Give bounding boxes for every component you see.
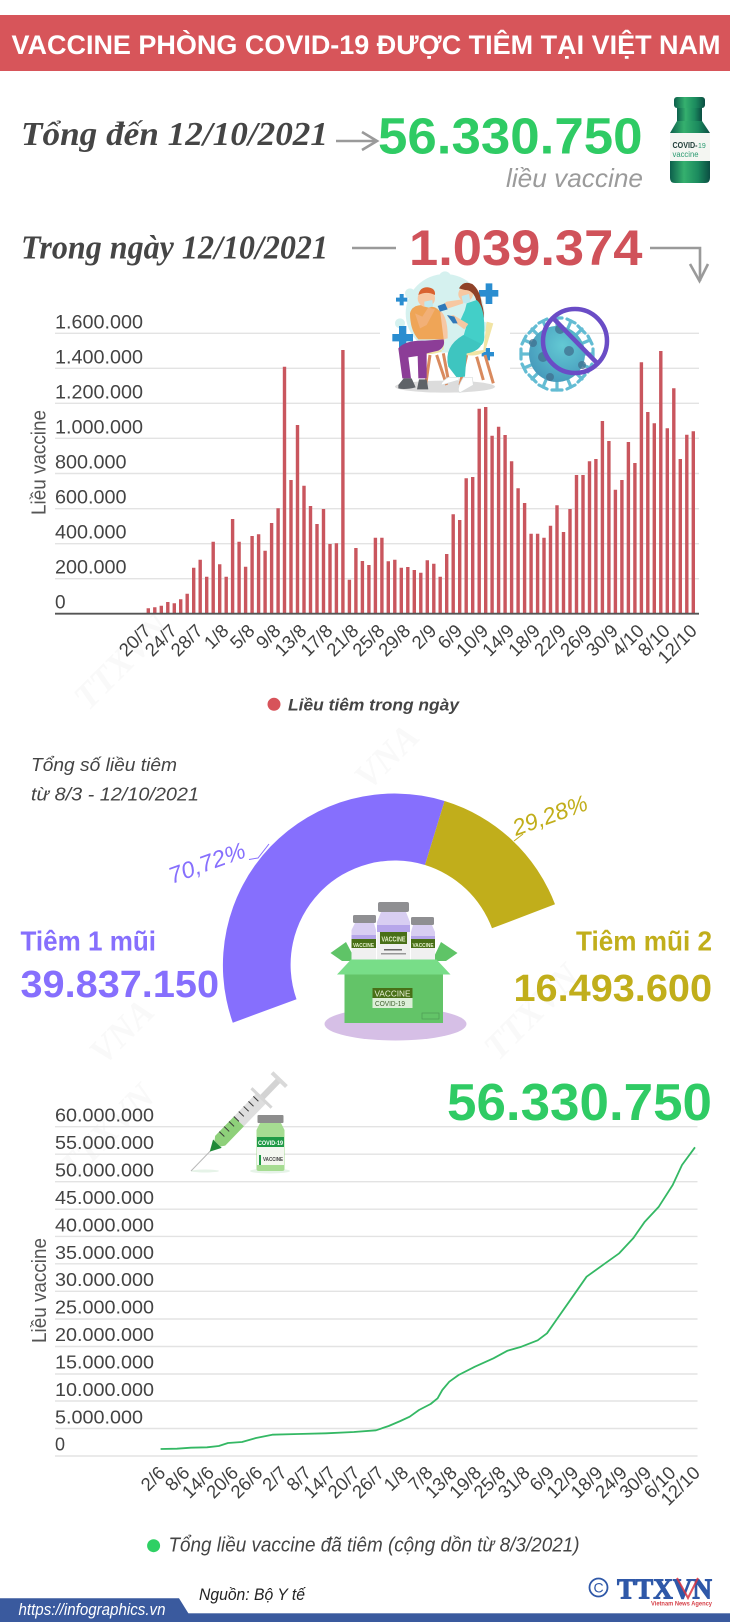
second dose number: 16.493.600	[514, 968, 712, 1010]
y axis title: Liều vaccine	[29, 1238, 51, 1343]
nurse	[458, 287, 473, 301]
x axis labels: 24/7	[141, 620, 181, 660]
x axis labels: 6/9	[525, 1462, 558, 1495]
icon: vaccine vial: COVID-	[672, 141, 698, 150]
x axis labels: 25/8	[469, 1462, 510, 1502]
percent: first dose: 70,72%	[165, 837, 249, 889]
footer band	[0, 1598, 730, 1622]
small vial right	[411, 917, 435, 961]
y axis labels: 1.200.000	[55, 382, 143, 403]
x axis labels: 1/8	[200, 620, 233, 653]
x axis labels: 1/8	[379, 1462, 412, 1495]
x axis labels: 26/9	[556, 620, 596, 660]
icon: vaccine vial: 19	[698, 143, 706, 150]
y axis labels: 45.000.000	[55, 1188, 154, 1208]
y axis labels: 800.000	[55, 452, 126, 473]
small vial	[256, 1115, 284, 1171]
x axis labels: 19/8	[445, 1462, 485, 1502]
line	[161, 1147, 695, 1449]
x axis labels: 2/9	[407, 620, 440, 653]
x axis labels: 7/8	[404, 1462, 437, 1495]
bar chart: daily doses	[28, 312, 701, 668]
x axis labels: 14/7	[299, 1462, 339, 1502]
line chart: cumulative doses	[29, 1106, 704, 1510]
watermark: TTXVN	[476, 954, 589, 1067]
watermark: TTXVN	[66, 604, 179, 717]
y axis labels: 40.000.000	[55, 1215, 154, 1235]
y axis labels: 1.000.000	[55, 417, 143, 438]
watermark: VNA	[81, 991, 162, 1072]
y axis labels: 30.000.000	[55, 1270, 154, 1290]
y axis labels: 200.000	[55, 557, 126, 578]
logo: TTXVN: Vietnam News Agency	[651, 1602, 713, 1608]
title: VACCINE PHÒNG COVID-19 ĐƯỢC TIÊM TẠI VIỆT NAM	[12, 29, 720, 60]
small vial left: VACCINE	[353, 943, 374, 949]
x axis labels: 10/9	[452, 620, 492, 660]
x axis labels: 20/7	[323, 1462, 364, 1502]
y axis labels: 20.000.000	[55, 1325, 154, 1345]
icon: vaccine vial	[670, 97, 710, 183]
patient	[410, 305, 447, 339]
x axis labels: 21/8	[322, 620, 362, 660]
x axis labels: 18/9	[566, 1462, 607, 1502]
x axis labels: 8/7	[282, 1462, 315, 1495]
y axis title: Liều vaccine	[28, 410, 50, 515]
y axis labels: 400.000	[55, 522, 126, 543]
x axis labels: 12/10	[653, 620, 701, 668]
icon: vaccination scene	[392, 271, 498, 393]
x axis labels: 29/8	[374, 620, 414, 660]
ban sign	[543, 309, 607, 373]
bars	[148, 350, 693, 614]
watermark	[51, 604, 589, 1187]
x axis labels	[136, 1462, 704, 1510]
connector lines	[249, 844, 269, 860]
box body	[344, 974, 443, 1023]
flaps	[330, 942, 356, 961]
arrow: daily down	[650, 248, 708, 281]
x axis labels: 9/8	[252, 620, 285, 653]
gauge caption: từ 8/3 - 12/10/2021	[31, 785, 199, 805]
y axis labels: 15.000.000	[55, 1352, 154, 1372]
gauge caption	[31, 755, 199, 805]
y axis labels: 50.000.000	[55, 1160, 154, 1180]
y axis labels: 5.000.000	[55, 1407, 143, 1427]
title banner	[0, 15, 730, 71]
x axis labels: 14/9	[478, 620, 518, 660]
y axis labels: 55.000.000	[55, 1133, 154, 1153]
x axis labels: 17/8	[296, 620, 337, 660]
y axis labels	[55, 1106, 154, 1455]
x axis labels	[115, 620, 701, 668]
gauge caption: Tổng số liều tiêm	[31, 755, 177, 775]
small vial left	[352, 915, 376, 961]
daily heading: Trong ngày 12/10/2021	[21, 230, 328, 266]
icon: vaccine vial: vaccine	[672, 150, 699, 159]
large vial centre	[377, 902, 410, 960]
small vial right: VACCINE	[412, 943, 434, 949]
box label: COVID-19	[375, 999, 405, 1008]
footer url: https://infographics.vn	[18, 1600, 166, 1619]
x axis labels: 2/7	[258, 1462, 291, 1495]
y axis labels: 1.400.000	[55, 347, 143, 368]
x axis labels: 22/9	[530, 620, 570, 660]
second dose label: Tiêm mũi 2	[576, 926, 712, 957]
logo: TTXVN: TTXVN	[617, 1574, 712, 1606]
shadow	[395, 381, 495, 393]
box label	[372, 988, 412, 1008]
large vial centre: VACCINE	[382, 936, 406, 944]
y axis labels	[55, 312, 143, 613]
y axis labels: 10.000.000	[55, 1380, 154, 1400]
y axis labels: 0	[55, 1435, 65, 1455]
segment: second dose	[425, 801, 555, 928]
x axis labels: 26/6	[226, 1462, 267, 1502]
box label: VACCINE	[374, 990, 411, 998]
x axis labels: 12/10	[656, 1462, 704, 1510]
x axis labels: 5/8	[226, 620, 259, 653]
small vial: COVID-19	[258, 1140, 283, 1147]
x axis labels: 20/6	[202, 1462, 242, 1502]
total number: 56.330.750	[378, 108, 642, 164]
chairs	[426, 353, 493, 385]
y axis labels: 35.000.000	[55, 1243, 154, 1263]
x axis labels: 14/6	[178, 1462, 218, 1502]
chart legend: cumulative: Tổng liều vaccine đã tiêm (cộng dồn từ 8/3/2021)	[168, 1535, 580, 1557]
x axis labels: 26/7	[348, 1462, 388, 1502]
x axis labels: 8/10	[634, 620, 674, 660]
box lid	[337, 960, 450, 974]
x axis labels: 6/10	[639, 1462, 680, 1502]
x axis labels: 30/9	[615, 1462, 655, 1502]
first dose label: Tiêm 1 mũi	[20, 926, 156, 957]
small vial: VACCINE	[263, 1157, 283, 1163]
icon: vaccine box	[324, 902, 466, 1040]
x axis labels: 13/8	[421, 1462, 461, 1502]
x axis labels: 6/9	[433, 620, 466, 653]
watermark: TTXVN	[51, 1074, 164, 1187]
source: Nguồn: Bộ Y tế	[199, 1585, 306, 1604]
arrow: total	[336, 132, 377, 150]
x axis labels: 20/7	[115, 620, 155, 660]
y axis labels: 1.600.000	[55, 312, 143, 333]
y axis labels: 60.000.000	[55, 1106, 154, 1126]
unit label: liều vaccine	[506, 163, 643, 193]
x axis labels: 8/6	[161, 1462, 194, 1495]
daily number: 1.039.374	[409, 220, 643, 276]
x axis labels: 28/7	[166, 620, 207, 660]
x axis labels: 30/9	[582, 620, 622, 660]
x axis labels: 24/9	[591, 1462, 631, 1502]
logo: TTXVN	[590, 1574, 713, 1608]
donut gauge	[165, 790, 591, 1023]
segment: first dose	[223, 794, 445, 1023]
x axis labels: 2/6	[136, 1462, 169, 1495]
x axis labels: 31/8	[494, 1462, 534, 1502]
x axis labels: 12/9	[542, 1462, 582, 1502]
x axis labels: 25/8	[348, 620, 388, 660]
icon: crossed-out virus	[521, 309, 607, 390]
percent: second dose: 29,28%	[508, 790, 591, 841]
watermark: VNA	[346, 716, 427, 797]
total heading: Tổng đến 12/10/2021	[21, 116, 328, 153]
logo: TTXVN: C	[593, 1580, 604, 1596]
y axis labels: 25.000.000	[55, 1298, 154, 1318]
x axis labels: 13/8	[270, 620, 311, 660]
plus signs	[392, 283, 498, 360]
chart legend: daily: Liều tiêm trong ngày	[288, 696, 461, 714]
y axis labels: 0	[55, 592, 66, 613]
x axis labels: 4/10	[608, 620, 648, 660]
first dose number: 39.837.150	[20, 964, 219, 1006]
cumulative number: 56.330.750	[447, 1074, 712, 1132]
x axis labels: 18/9	[504, 620, 544, 660]
y axis labels: 600.000	[55, 487, 126, 508]
icon: syringe and vial	[181, 1068, 291, 1181]
dash line: daily	[352, 247, 396, 249]
syringe	[181, 1068, 291, 1181]
